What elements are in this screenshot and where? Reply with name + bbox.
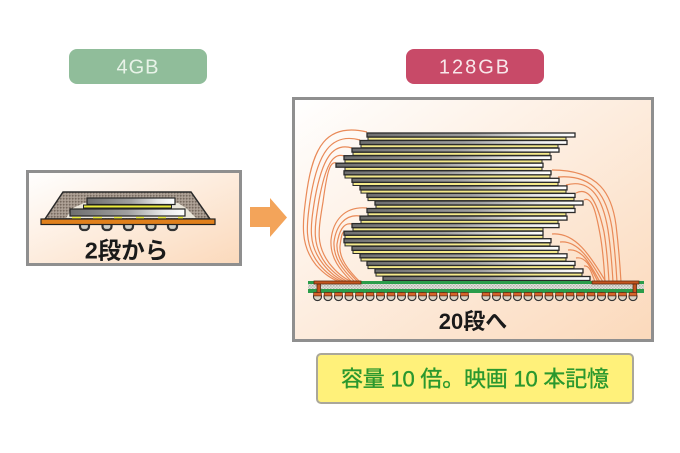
- adhesive layer: [84, 205, 172, 208]
- panel: 20-layer package: [294, 98, 652, 340]
- solder balls: right row: [482, 292, 637, 301]
- caption: 20 layers: 20段へ: [439, 309, 507, 334]
- caption: 2 layers: 2段から: [85, 238, 168, 264]
- right interposer: [592, 281, 639, 293]
- contact pads: [72, 217, 183, 219]
- callout: [317, 354, 633, 403]
- solder balls: left row: [314, 292, 468, 301]
- label: 4GB: 4GB: [116, 56, 160, 78]
- left interposer: [314, 281, 361, 293]
- mold casing: [45, 192, 210, 219]
- lower die: [70, 209, 185, 216]
- substrate: [308, 281, 644, 293]
- label: 4GB: [69, 49, 207, 84]
- chip stack: [336, 133, 590, 280]
- bonding wires: [303, 130, 621, 282]
- callout: 容量 10 倍。映画 10 本記憶: [341, 366, 609, 392]
- panel: 2-layer package: [28, 172, 240, 264]
- substrate: [41, 219, 215, 224]
- label: 128GB: [406, 49, 544, 84]
- arrow: [250, 198, 287, 237]
- label: 128GB: 128GB: [439, 56, 511, 78]
- solder balls: [80, 221, 177, 230]
- upper die: [87, 198, 175, 204]
